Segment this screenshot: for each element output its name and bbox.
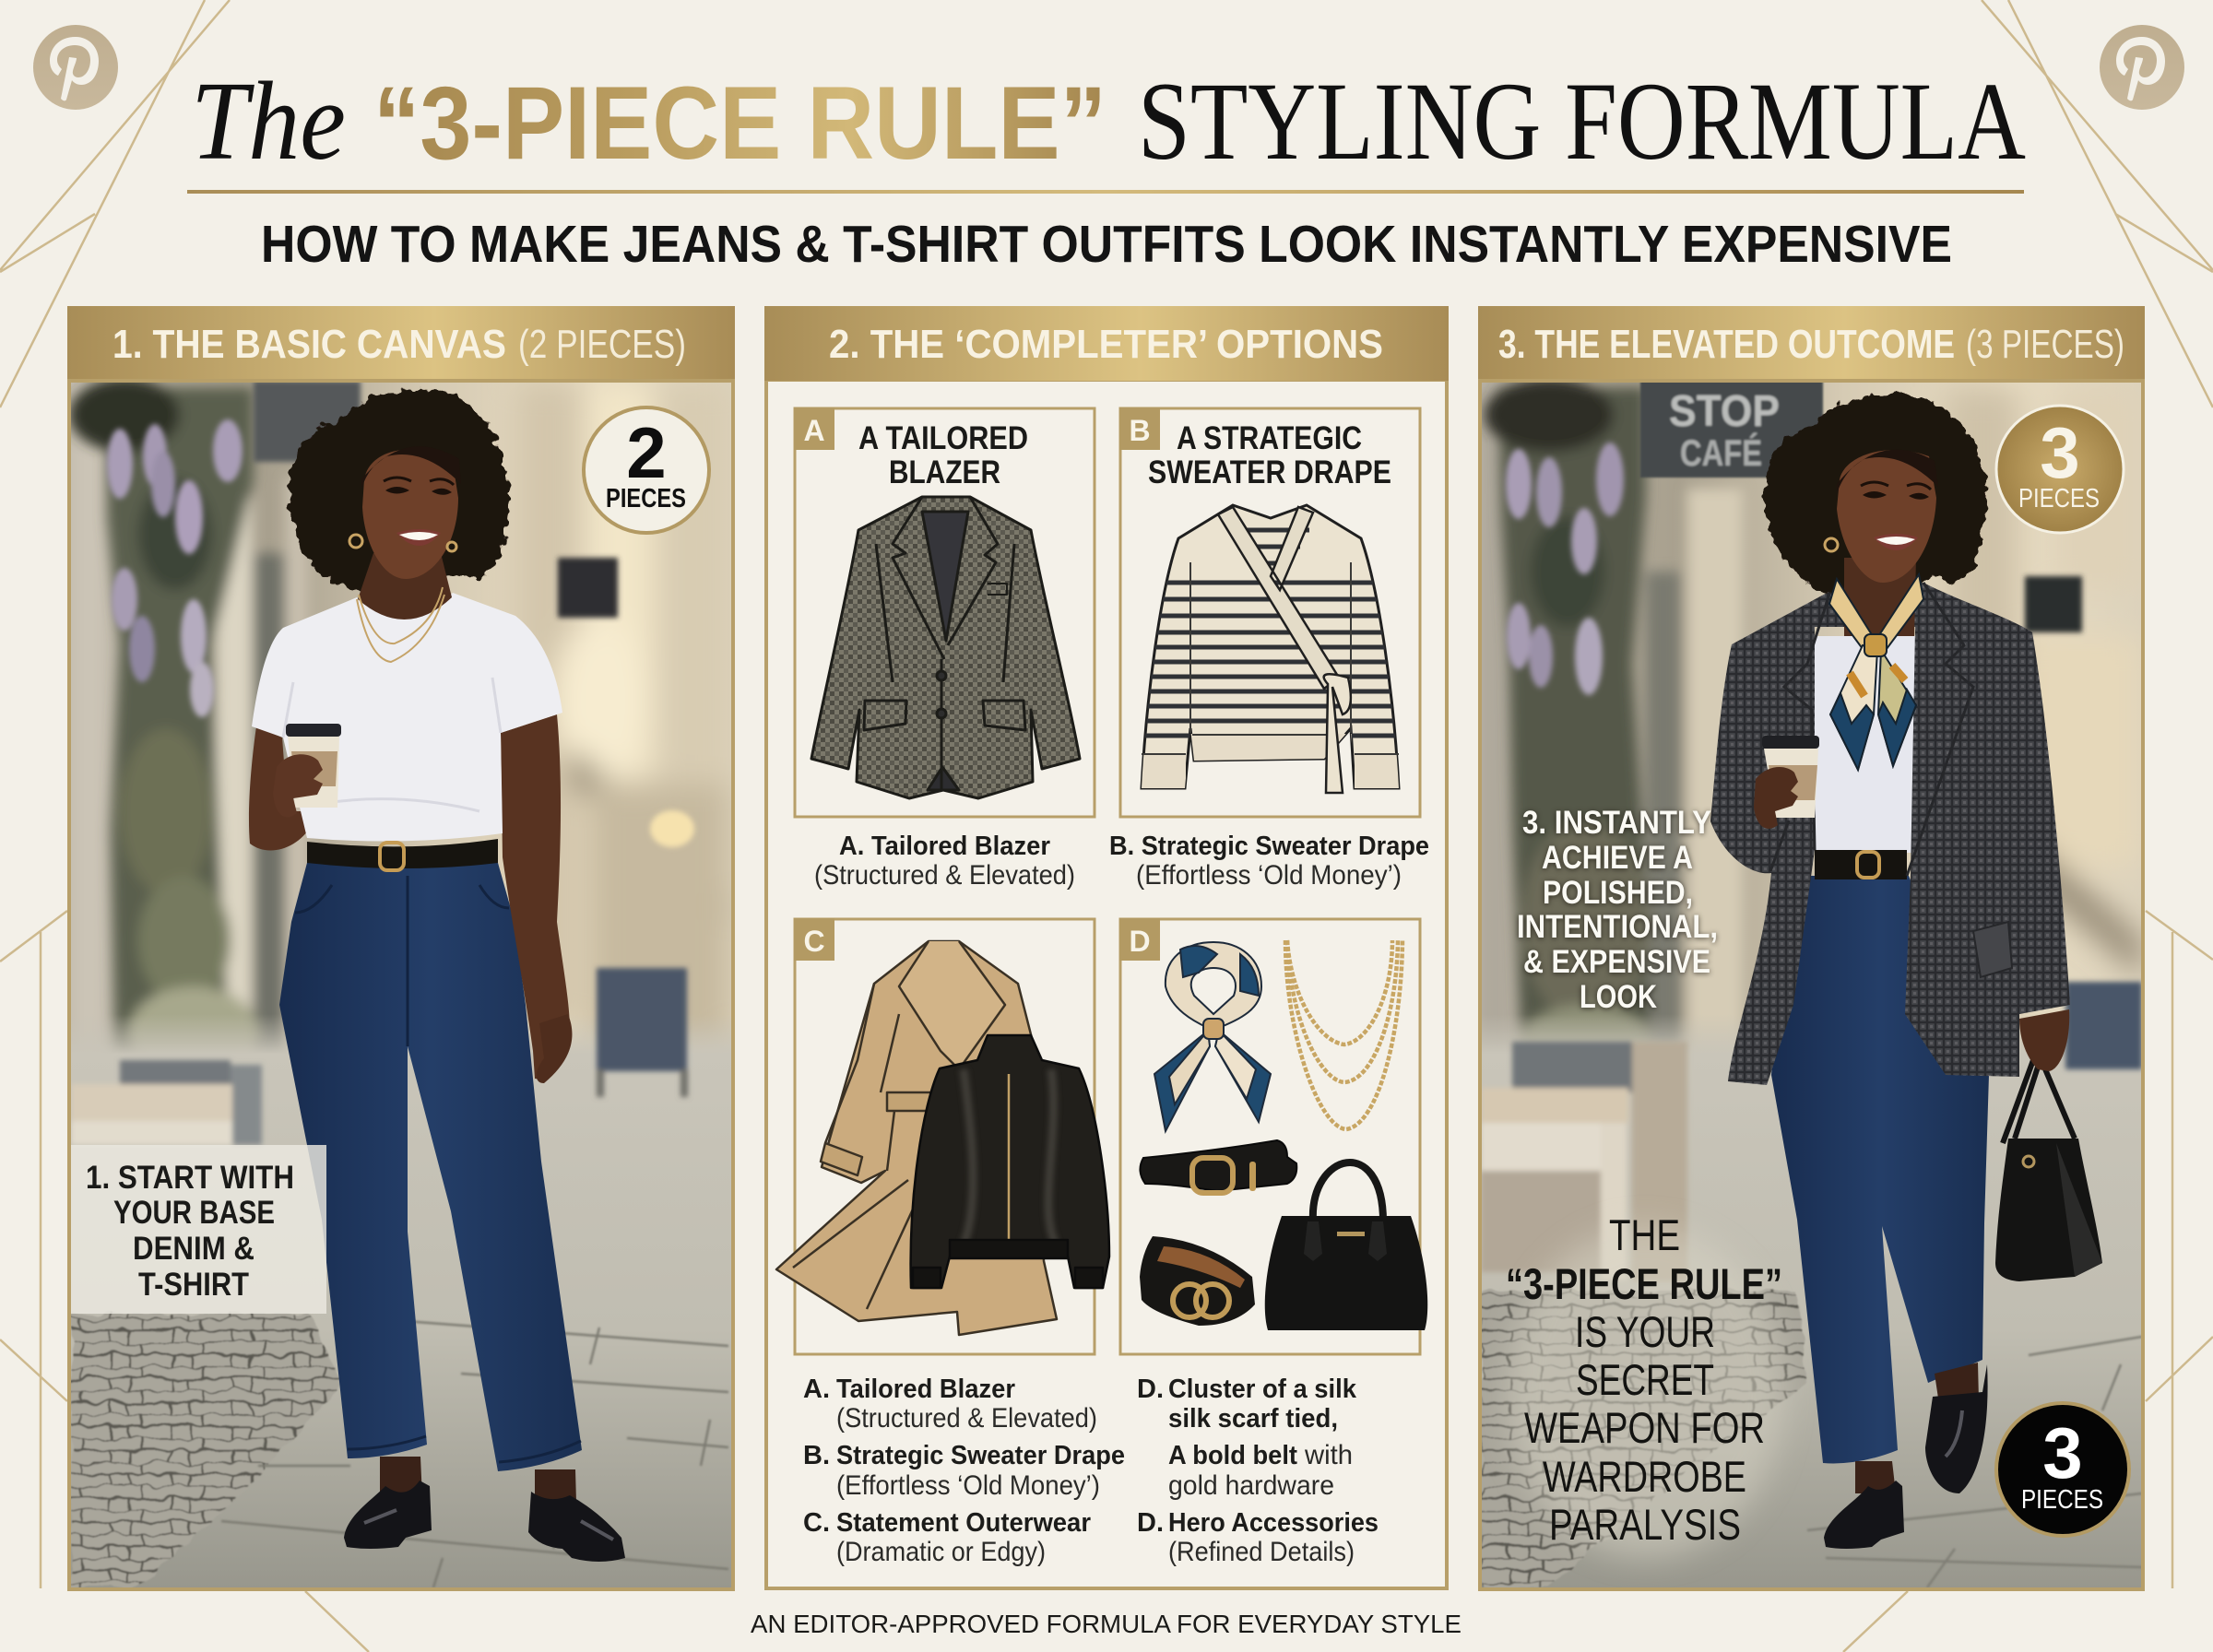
caption B: B. Strategic Sweater Drape <box>1109 832 1429 861</box>
panel 3 text: instantly achieve: INTENTIONAL, <box>1517 909 1718 945</box>
card heading A <box>858 420 1028 490</box>
panel 1 heading: (2 PIECES) <box>518 322 686 367</box>
panel 2 heading: 2. THE ‘COMPLETER’ OPTIONS <box>829 322 1383 367</box>
woman 1 facial features <box>349 478 456 551</box>
legend right: D. <box>1137 1375 1164 1404</box>
woman 3 hand <box>1754 767 1798 829</box>
panel 3 photo: woman with blazer, scarf and bag <box>1481 378 2142 1587</box>
badge: 2 pieces: 2 <box>626 412 667 493</box>
illustration: striped wrap sweater <box>1139 505 1402 793</box>
panel 3 text: instantly achieve: 3. INSTANTLY <box>1522 805 1711 841</box>
woman 3 belt <box>1815 850 1907 879</box>
woman 1 hair <box>290 389 509 590</box>
footer: AN EDITOR-APPROVED FORMULA FOR EVERYDAY STYLE <box>751 1610 1462 1638</box>
panel 3 heading <box>1478 306 2145 381</box>
badge A: A <box>803 414 825 447</box>
panel 3 text: instantly achieve <box>1517 805 1718 1015</box>
woman 3 silk scarf <box>1829 574 1923 770</box>
panel 3 text: secret weapon statement: “3-PIECE RULE” <box>1506 1259 1782 1308</box>
badge: 2 pieces: PIECES <box>606 484 686 513</box>
card heading A: A TAILORED <box>858 420 1028 456</box>
panel 3 text: instantly achieve: ACHIEVE A <box>1542 840 1693 876</box>
legend right: D. <box>1137 1508 1164 1538</box>
legend right: Cluster of a silk <box>1168 1375 1357 1404</box>
legend right: Hero Accessories <box>1168 1508 1379 1538</box>
panel 3 frame <box>1480 381 2143 1589</box>
panel 3 text: instantly achieve: LOOK <box>1580 979 1657 1015</box>
legend right: gold hardware <box>1168 1470 1334 1501</box>
panel 3 text: instantly achieve: & EXPENSIVE <box>1523 944 1710 980</box>
woman 3 check blazer <box>1710 583 2070 1085</box>
woman 1 far hand <box>537 1014 572 1083</box>
woman 1 t-shirt <box>252 593 562 842</box>
caption A: (Structured & Elevated) <box>814 860 1075 891</box>
woman 1 jeans <box>279 863 582 1471</box>
legend right: (Refined Details) <box>1168 1537 1355 1567</box>
illustration: layered gold necklaces <box>1285 940 1402 1129</box>
caption B: (Effortless ‘Old Money’) <box>1136 860 1402 891</box>
badge: gold 3 pieces: 3 <box>2040 412 2080 493</box>
option A card: tailored blazer <box>794 407 1095 817</box>
illustration: logo belt <box>1140 1236 1255 1326</box>
illustration: black belt <box>1140 1140 1296 1193</box>
panel 1: the basic canvas <box>67 306 735 1589</box>
panel 1 callout: start with your base: 1. START WITH <box>86 1160 294 1196</box>
woman 1 hand <box>284 754 323 811</box>
legend left <box>803 1375 1125 1567</box>
caption A <box>814 832 1075 891</box>
badge: black 3 pieces <box>1996 1403 2129 1536</box>
panel 1 callout: start with your base: T-SHIRT <box>138 1267 249 1303</box>
panel 2 body <box>766 380 1447 1588</box>
woman 3 loafers <box>1824 1363 1988 1549</box>
legend left: A. <box>803 1375 830 1404</box>
panel 3 text: secret weapon statement: THE <box>1609 1210 1680 1259</box>
badge C <box>794 918 834 961</box>
woman 1 neck and face <box>357 446 461 662</box>
badge: gold 3 pieces: PIECES <box>2018 484 2100 513</box>
badge D <box>1119 918 1160 961</box>
woman 3 neck and face <box>1837 450 1938 636</box>
option B card: sweater drape <box>1119 407 1420 817</box>
caption A: A. Tailored Blazer <box>839 832 1050 861</box>
badge A <box>794 407 834 450</box>
panel 1 photo: woman in white t-shirt and jeans <box>69 378 731 1587</box>
badge: black 3 pieces: PIECES <box>2021 1485 2103 1515</box>
subtitle: HOW TO MAKE JEANS & T-SHIRT OUTFITS LOOK INSTANTLY EXPENSIVE <box>261 215 1952 274</box>
card heading B: SWEATER DRAPE <box>1148 454 1391 490</box>
illustration: silk scarf <box>1154 942 1271 1131</box>
woman 3 coffee cup <box>1762 736 1819 818</box>
panel 3 text: instantly achieve: POLISHED, <box>1543 875 1693 911</box>
legend right <box>1137 1375 1379 1567</box>
title rule <box>187 190 2024 194</box>
panel 2: the completer options <box>764 306 1449 1588</box>
panel 2 heading <box>764 306 1449 381</box>
legend left: Tailored Blazer <box>836 1375 1015 1404</box>
card heading B <box>1148 420 1391 490</box>
panel 3 text: secret weapon statement <box>1506 1210 1782 1549</box>
badge B: B <box>1129 414 1151 447</box>
panel 3 text: secret weapon statement: SECRET <box>1576 1355 1714 1404</box>
woman 3 white t-shirt <box>1815 636 1918 853</box>
badge C: C <box>803 925 825 958</box>
legend left: C. <box>803 1508 830 1538</box>
woman 3 handbag and hand <box>1995 1009 2102 1281</box>
badge: gold 3 pieces <box>1996 406 2124 533</box>
panel 3 photo: woman with blazer, scarf and bag: STOP <box>1669 387 1780 436</box>
legend left: (Dramatic or Edgy) <box>836 1537 1046 1567</box>
badge: 2 pieces <box>584 407 709 533</box>
panel 3 photo: woman with blazer, scarf and bag: CAFÉ <box>1680 432 1762 474</box>
woman 1 coffee cup <box>286 724 341 808</box>
legend left: Strategic Sweater Drape <box>836 1441 1125 1470</box>
option C card: statement outerwear <box>776 918 1109 1354</box>
panel 1 heading: 1. THE BASIC CANVAS <box>112 322 506 367</box>
title: The <box>191 59 346 183</box>
panel 1 heading <box>67 306 735 381</box>
panel 1 callout: start with your base: YOUR BASE <box>113 1195 275 1231</box>
title <box>191 59 2026 183</box>
card heading B: A STRATEGIC <box>1177 420 1362 456</box>
legend right: A bold belt <box>1168 1441 1297 1470</box>
panel 3 text: secret weapon statement: WEAPON FOR <box>1524 1403 1765 1452</box>
caption B <box>1109 832 1429 891</box>
panel 3 heading: 3. THE ELEVATED OUTCOME <box>1498 322 1955 367</box>
legend right: silk scarf tied, <box>1168 1404 1338 1434</box>
panel 1 callout: start with your base <box>71 1145 326 1314</box>
illustration: black bomber jacket <box>911 1035 1109 1288</box>
title: “3-PIECE RULE” <box>373 65 1106 181</box>
icon: pinterest right <box>2100 25 2184 110</box>
legend left: Statement Outerwear <box>836 1508 1091 1538</box>
legend left: (Structured & Elevated) <box>836 1403 1097 1434</box>
option D card: hero accessories <box>1119 918 1427 1354</box>
legend left: B. <box>803 1441 830 1470</box>
panel 3 text: secret weapon statement: PARALYSIS <box>1549 1500 1741 1549</box>
panel 3 heading: (3 PIECES) <box>1966 322 2124 367</box>
woman 3 facial features <box>1825 482 1931 551</box>
badge B <box>1119 407 1160 450</box>
badge: black 3 pieces: 3 <box>2042 1412 2083 1493</box>
illustration: black handbag <box>1265 1162 1427 1330</box>
badge D: D <box>1129 925 1151 958</box>
panel 3: the elevated outcome <box>1478 306 2145 1589</box>
woman 3 jeans <box>1771 876 1989 1463</box>
title: STYLING FORMULA <box>1138 60 2026 183</box>
legend right: with <box>1304 1440 1353 1470</box>
panel 3 text: secret weapon statement: IS YOUR <box>1575 1307 1715 1356</box>
legend left: (Effortless ‘Old Money’) <box>836 1470 1100 1501</box>
woman 1 belt <box>307 839 498 870</box>
icon: pinterest left <box>33 25 118 110</box>
card heading A: BLAZER <box>889 454 1000 490</box>
woman 1 arms <box>249 714 570 1079</box>
illustration: trench coat <box>776 941 1057 1335</box>
woman 3 hair <box>1765 394 1987 595</box>
panel 1 frame <box>69 381 733 1589</box>
woman 1 ankles and loafers <box>344 1457 625 1562</box>
illustration: houndstooth blazer <box>811 497 1080 798</box>
panel 3 text: secret weapon statement: WARDROBE <box>1543 1452 1746 1501</box>
panel 1 callout: start with your base: DENIM & <box>133 1231 254 1267</box>
